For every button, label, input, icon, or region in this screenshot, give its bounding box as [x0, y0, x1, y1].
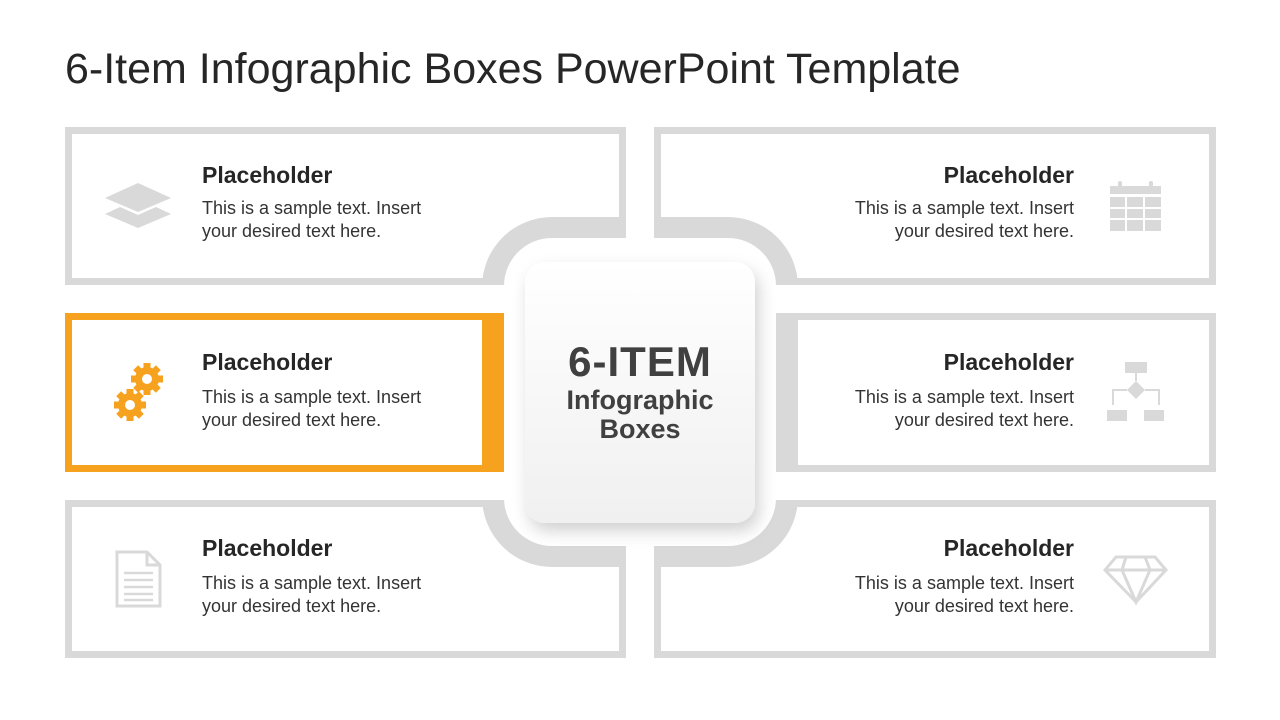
- text: top-left: Placeholder: [202, 162, 332, 188]
- text: bottom-left: your desired text here.: [202, 596, 381, 616]
- icon: gears: [114, 363, 163, 421]
- panel: middle-left box (highlighted): [65, 313, 504, 472]
- icon: calendar: [1110, 181, 1161, 231]
- center ring: [0, 120, 1280, 665]
- panel: bottom-right box: [658, 504, 1212, 654]
- text: middle-left: your desired text here.: [202, 410, 381, 430]
- text: middle-right: This is a sample text. Insert: [855, 387, 1074, 407]
- text: top-left: your desired text here.: [202, 221, 381, 241]
- icon: diamond: [1105, 557, 1166, 602]
- icon: flowchart: [1107, 362, 1164, 421]
- text: middle-right: [855, 349, 1074, 430]
- text: top-right: [855, 162, 1074, 241]
- text: top-right: Placeholder: [944, 162, 1074, 188]
- panel: bottom-left box: [68, 504, 622, 654]
- center card: Infographic: [566, 385, 714, 415]
- text: middle-left: [202, 349, 421, 430]
- center card: [525, 262, 755, 523]
- text: bottom-right: This is a sample text. Insert: [855, 573, 1074, 593]
- text: top-right: your desired text here.: [895, 221, 1074, 241]
- title: 6-Item Infographic Boxes PowerPoint Template: [65, 45, 961, 93]
- text: bottom-left: Placeholder: [202, 535, 332, 561]
- text: middle-left: Placeholder: [202, 349, 332, 375]
- text: bottom-right: Placeholder: [944, 535, 1074, 561]
- text: top-left: [202, 162, 421, 241]
- text: bottom-right: [855, 535, 1074, 616]
- panel: top-left box: [68, 130, 622, 282]
- text: top-left: This is a sample text. Insert: [202, 198, 421, 218]
- icon: document: [117, 552, 160, 606]
- text: bottom-left: This is a sample text. Insert: [202, 573, 421, 593]
- text: bottom-right: your desired text here.: [895, 596, 1074, 616]
- text: middle-left: This is a sample text. Insert: [202, 387, 421, 407]
- text: middle-right: Placeholder: [944, 349, 1074, 375]
- panel: top-right box: [658, 130, 1212, 282]
- panel: middle-right box: [776, 313, 1216, 472]
- icon: layers: [105, 183, 171, 228]
- text: top-right: This is a sample text. Insert: [855, 198, 1074, 218]
- text: bottom-left: [202, 535, 421, 616]
- center card: 6-ITEM: [568, 338, 712, 385]
- center card: Boxes: [599, 414, 681, 444]
- text: middle-right: your desired text here.: [895, 410, 1074, 430]
